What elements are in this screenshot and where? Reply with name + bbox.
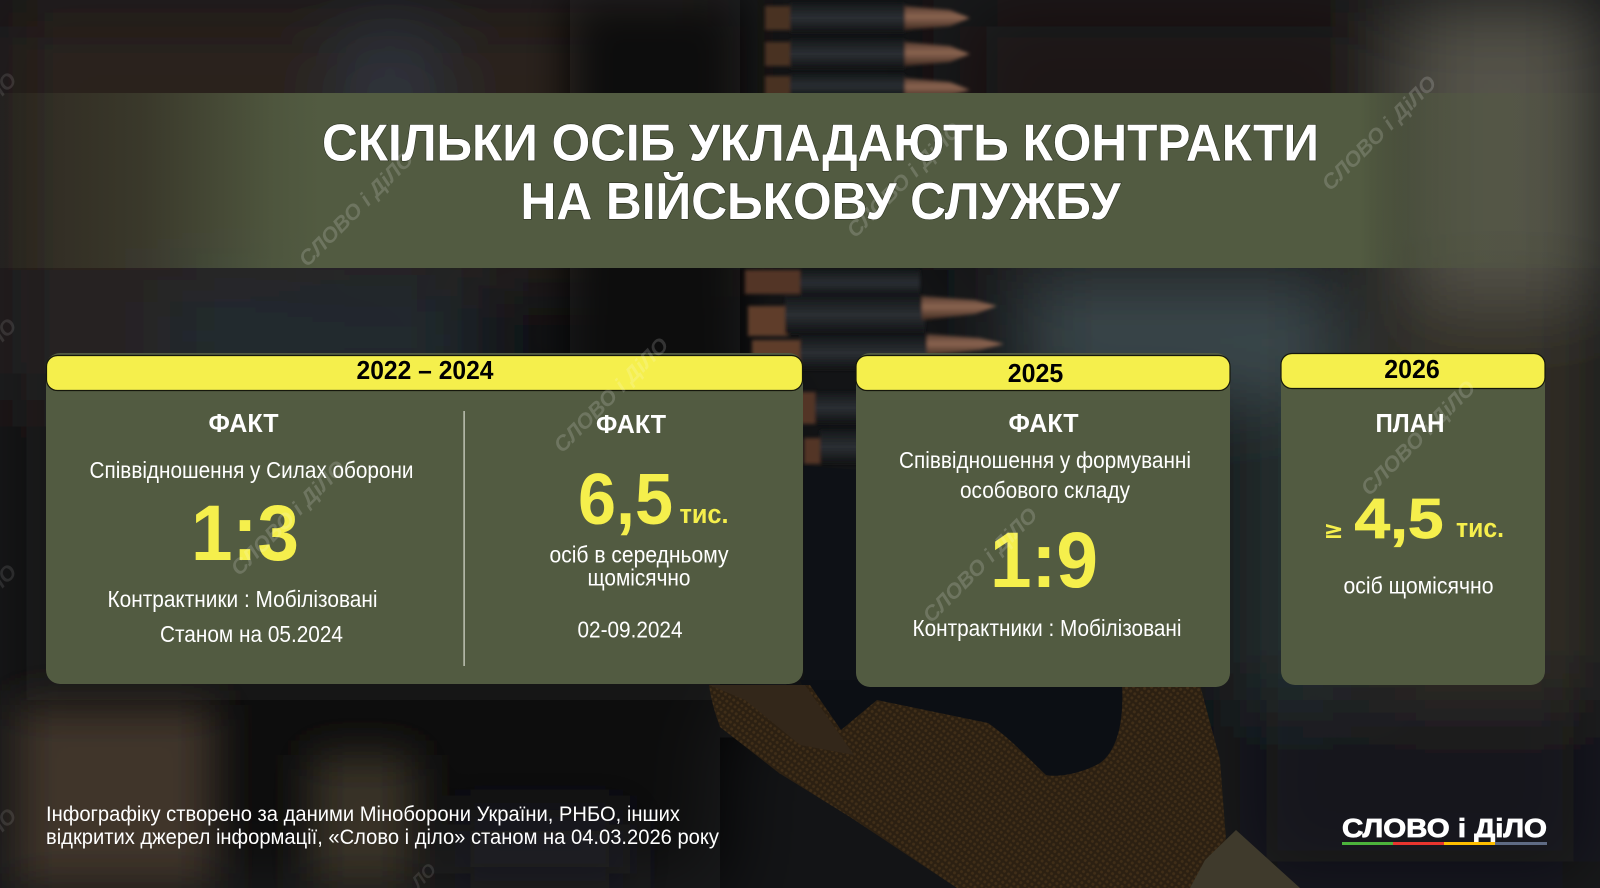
panel: 2022–2024 xyxy=(46,353,803,684)
panel: 2026: тис. xyxy=(1456,513,1504,543)
year header 2025: 2025 xyxy=(1008,358,1063,388)
left column: ratio in Defence Forces: Контрактники : Мобілізовані xyxy=(108,586,378,612)
panel: 2025: особового складу xyxy=(960,477,1130,503)
right column: 6.5 thousand monthly: тис. xyxy=(680,499,728,529)
watermarks: СЛОВО і ДіЛО xyxy=(919,504,1042,627)
left column: ratio in Defence Forces: ФАКТ xyxy=(208,408,279,438)
panel: 2026: 4,5 xyxy=(1354,487,1444,551)
panel: 2025: Співвідношення у формуванні xyxy=(899,447,1191,473)
watermarks: СЛОВО і ДіЛО xyxy=(843,119,966,242)
panel: 2026 xyxy=(1281,353,1545,685)
watermarks: СЛОВО і ДіЛО xyxy=(295,148,418,271)
left column: ratio in Defence Forces: 1:3 xyxy=(191,488,299,577)
watermarks: СЛОВО і ДіЛО xyxy=(1318,72,1441,195)
panel: 2026: ≥ xyxy=(1323,516,1344,544)
panel: 2026: ПЛАН xyxy=(1376,408,1444,438)
lower bullets xyxy=(745,270,1004,464)
right column: 6.5 thousand monthly: 6,5 xyxy=(578,460,673,540)
year header 2026 xyxy=(1281,354,1545,388)
title band xyxy=(0,93,1600,268)
right column: 6.5 thousand monthly xyxy=(550,409,729,642)
watermarks: СЛОВО і ДіЛО xyxy=(227,457,350,580)
title text xyxy=(322,114,1319,231)
year header 2022–2024 xyxy=(46,355,802,390)
logo: Слово і Діло: СЛОВО і ДіЛО xyxy=(1342,813,1547,843)
left column: ratio in Defence Forces: Співвідношення у Силах оборони xyxy=(90,457,414,483)
right column: 6.5 thousand monthly: 02-09.2024 xyxy=(578,616,683,642)
top bullets xyxy=(765,3,970,98)
panel: 2025: Контрактники : Мобілізовані xyxy=(912,615,1182,641)
title text: НА ВІЙСЬКОВУ СЛУЖБУ xyxy=(520,172,1121,231)
year header 2022–2024: 2022 – 2024 xyxy=(356,355,494,385)
panel: 2026: осіб щомісячно xyxy=(1344,572,1494,598)
title text: СКІЛЬКИ ОСІБ УКЛАДАЮТЬ КОНТРАКТИ xyxy=(322,114,1319,172)
gloved hand xyxy=(709,466,1300,888)
panel: 2025: ФАКТ xyxy=(1008,408,1079,438)
left column: ratio in Defence Forces xyxy=(90,408,414,647)
right column: 6.5 thousand monthly: ФАКТ xyxy=(596,409,666,439)
right column: 6.5 thousand monthly: щомісячно xyxy=(588,564,690,590)
panel: 2025: 1:9 xyxy=(990,515,1098,604)
left column: ratio in Defence Forces: Станом на 05.2024 xyxy=(160,621,343,647)
source note xyxy=(46,803,719,849)
year header 2025 xyxy=(856,356,1230,390)
source note: відкритих джерел інформації, «Слово і діло» станом на 04.03.2026 року xyxy=(46,826,719,849)
year header 2026: 2026 xyxy=(1384,354,1440,384)
panel: 2025 xyxy=(856,353,1230,687)
right column: 6.5 thousand monthly: осіб в середньому xyxy=(550,542,729,568)
watermarks: СЛОВО і ДіЛО xyxy=(1357,377,1480,500)
source note: Інфографіку створено за даними Міноборони України, РНБО, інших xyxy=(46,803,680,826)
watermarks: СЛОВО і ДіЛО xyxy=(550,334,673,457)
